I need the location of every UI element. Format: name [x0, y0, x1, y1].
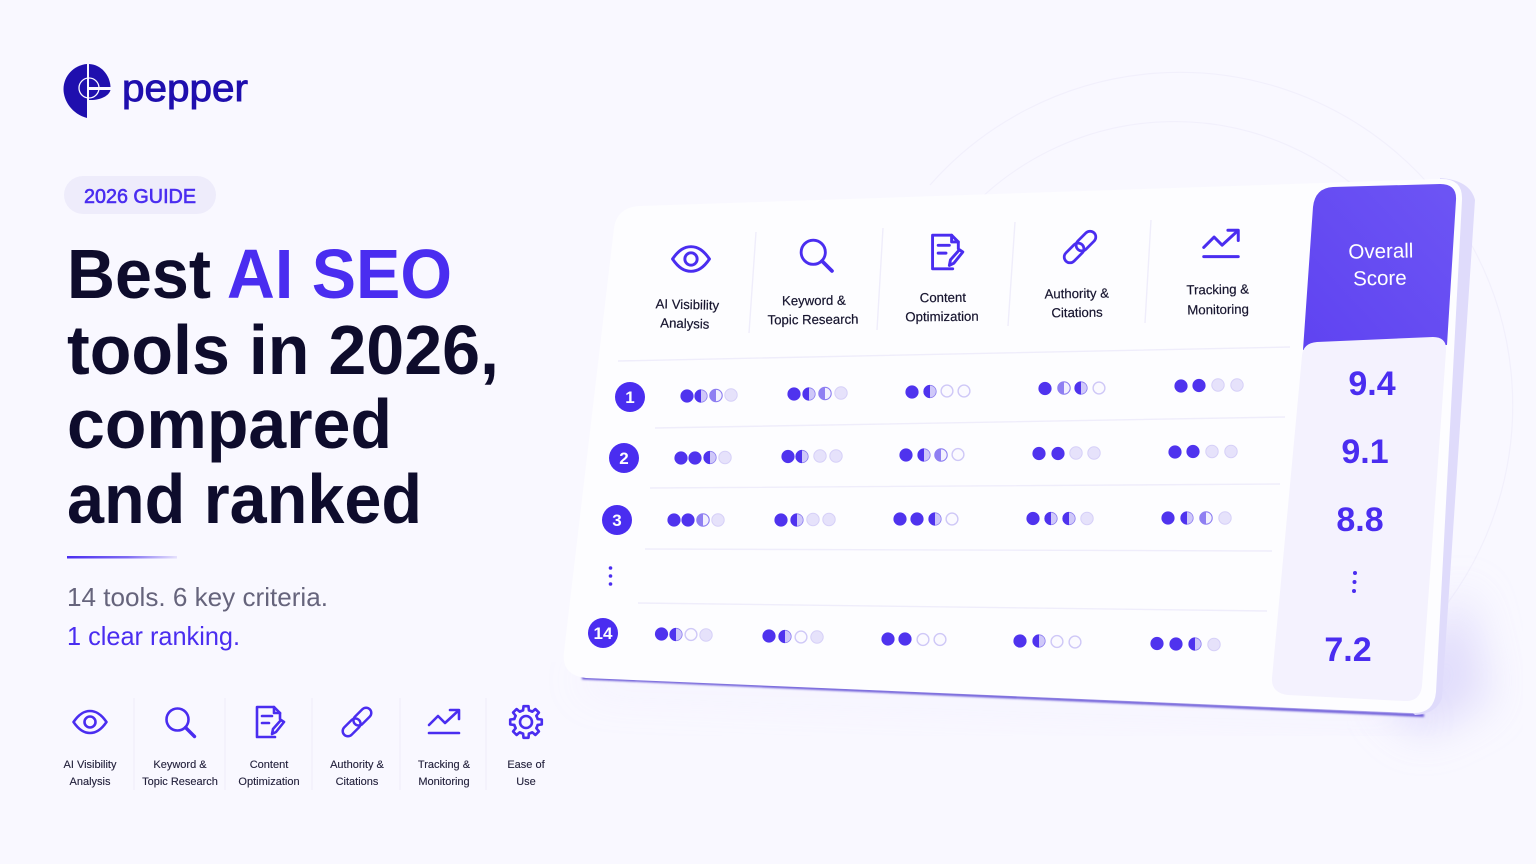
title: and ranked [67, 460, 422, 538]
row 14 [588, 618, 1220, 651]
title: compared [67, 385, 392, 463]
criterion: authority [330, 706, 385, 788]
row 1: 1 [625, 388, 635, 407]
row 2: 2 [619, 449, 629, 468]
criterion: AI visibility: AI Visibility [64, 759, 117, 771]
column: keyword research [767, 240, 859, 327]
column: content optimization: Optimization [905, 309, 979, 324]
title: tools in 2026, [67, 311, 499, 389]
icon: pepper mark [64, 64, 110, 118]
criterion: tracking: Tracking & [418, 759, 471, 771]
criterion: ease of use: Use [516, 776, 536, 788]
score 9.1: 9.1 [1341, 433, 1389, 471]
row 2 [609, 443, 1237, 473]
criteria strip [64, 706, 546, 788]
criterion: keyword research [142, 708, 218, 788]
subtitle: 14 tools. 6 key criteria. [67, 582, 328, 612]
criterion: authority: Citations [336, 776, 379, 788]
row 14: 14 [594, 624, 613, 643]
column: AI visibility: AI Visibility [655, 296, 720, 313]
column: authority: Citations [1051, 305, 1103, 320]
column: tracking: Tracking & [1186, 281, 1249, 298]
badge: 2026 guide [64, 176, 216, 214]
column: tracking: Monitoring [1187, 301, 1249, 318]
overall score header [1303, 184, 1456, 350]
criterion: tracking: Monitoring [418, 776, 470, 788]
criterion: AI visibility [64, 711, 117, 788]
badge: 2026 guide: 2026 GUIDE [84, 186, 196, 208]
row ellipsis [609, 566, 612, 586]
criterion: keyword research: Topic Research [142, 776, 218, 788]
row 3: 3 [612, 511, 622, 530]
logo: pepper [64, 64, 248, 118]
title underline [67, 556, 177, 558]
title [67, 235, 499, 538]
overall score header: Score [1353, 267, 1407, 290]
criterion: content optimization [238, 707, 300, 788]
column: content optimization [905, 235, 979, 324]
score 7.2: 7.2 [1324, 631, 1372, 669]
comparison card [564, 178, 1490, 735]
wordmark: pepper [122, 68, 248, 110]
row 3 [602, 505, 1231, 535]
criterion: keyword research: Keyword & [153, 759, 207, 771]
card side edge [1400, 178, 1475, 715]
column: AI visibility: Analysis [660, 315, 710, 332]
column: authority [1044, 229, 1110, 320]
column: tracking [1186, 230, 1250, 318]
score 9.4: 9.4 [1348, 365, 1396, 403]
card face [564, 179, 1462, 713]
card shadow [580, 590, 1490, 735]
criterion: AI visibility: Analysis [70, 776, 111, 788]
criterion: content optimization: Content [250, 759, 288, 771]
criterion: tracking [418, 710, 471, 788]
column: AI visibility [655, 247, 720, 332]
criterion: content optimization: Optimization [238, 776, 300, 788]
title: Best AI SEO [67, 235, 452, 313]
score ellipsis [1352, 571, 1357, 593]
column: authority: Authority & [1044, 286, 1109, 301]
row 1 [615, 379, 1243, 412]
column: keyword research: Topic Research [768, 312, 859, 327]
score 8.8: 8.8 [1336, 501, 1384, 539]
criterion: ease of use [507, 706, 546, 788]
subtitle: 1 clear ranking. [67, 621, 240, 651]
subtitle [67, 582, 328, 651]
overall score header: Overall [1348, 239, 1414, 264]
score panel [1272, 337, 1446, 701]
column: content optimization: Content [920, 290, 966, 305]
criterion: ease of use: Ease of [507, 759, 546, 771]
column: keyword research: Keyword & [782, 293, 846, 308]
criterion: authority: Authority & [330, 759, 385, 771]
